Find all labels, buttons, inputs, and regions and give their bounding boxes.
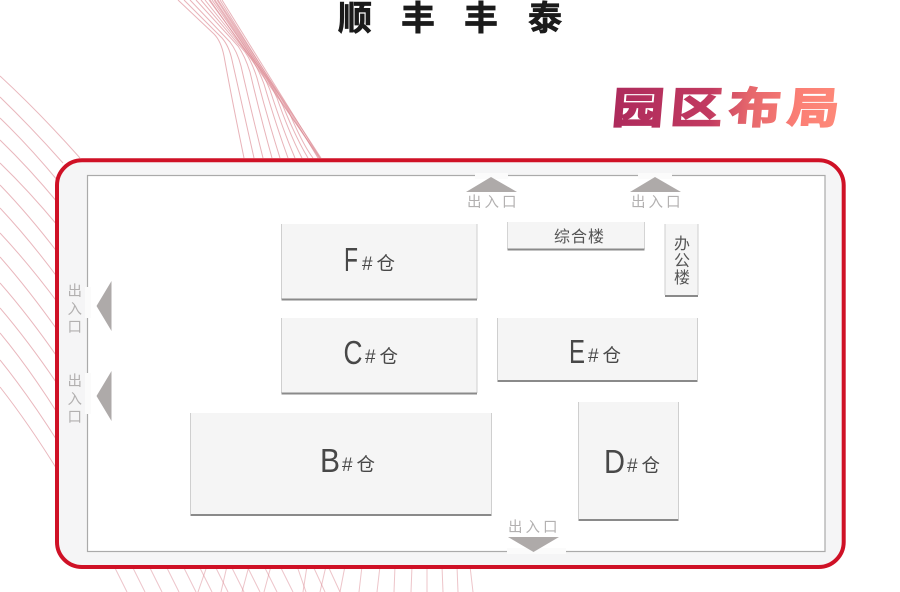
building: D warehouse: 仓 — [642, 452, 660, 478]
gate: left lower: 口 — [68, 406, 82, 427]
gate: top left: 出入口 — [467, 191, 520, 212]
building: F warehouse: 仓 — [376, 250, 395, 276]
building: 综合楼 — [508, 222, 644, 250]
gate: top left — [466, 177, 520, 212]
building: 办公楼: 楼 — [674, 264, 690, 288]
building: C warehouse: 仓 — [380, 343, 398, 369]
building: D warehouse: # — [627, 456, 638, 477]
gate gaps in boundary — [85, 173, 672, 554]
building: 办公楼: 公 — [674, 247, 690, 271]
gate: left upper — [68, 280, 112, 337]
gate: left lower: 出 — [68, 370, 82, 391]
background lines: top fan — [178, 0, 321, 158]
building: F warehouse: F — [344, 241, 358, 278]
gate: bottom — [508, 516, 560, 552]
building: F warehouse: # — [362, 254, 373, 275]
building: 办公楼: 办 — [674, 230, 690, 254]
building: C warehouse — [282, 318, 477, 394]
building: E warehouse: 仓 — [602, 342, 621, 368]
building: 综合楼: 综合楼 — [554, 223, 605, 247]
building: B warehouse — [190, 413, 492, 516]
title — [338, 0, 562, 40]
gate: bottom: 出入口 — [508, 516, 560, 537]
gate: left lower — [68, 370, 112, 427]
building: D warehouse: D — [604, 443, 625, 480]
building: F warehouse — [282, 224, 477, 300]
gate: left lower: 入 — [68, 388, 82, 409]
building: C warehouse: # — [365, 347, 376, 368]
gate: top right — [630, 177, 684, 212]
building: D warehouse — [578, 402, 678, 521]
building: E warehouse — [498, 318, 698, 382]
building: B warehouse: 仓 — [356, 451, 375, 477]
building: C warehouse: C — [344, 334, 362, 371]
gate: top right: 出入口 — [631, 191, 684, 212]
building: 办公楼 — [665, 224, 698, 297]
background lines: left fan — [0, 76, 80, 471]
background lines: bottom fan — [114, 566, 473, 592]
gate: left upper: 口 — [68, 316, 82, 337]
building: B warehouse: B — [320, 442, 340, 479]
panel: site plan frame — [57, 160, 844, 567]
building: B warehouse: # — [342, 455, 353, 476]
building: E warehouse: E — [569, 333, 585, 370]
building: E warehouse: # — [588, 346, 599, 367]
gate: left upper: 出 — [68, 280, 82, 301]
gate: left upper: 入 — [68, 298, 82, 319]
heading: 园区布局: 园区布局 — [610, 74, 849, 136]
